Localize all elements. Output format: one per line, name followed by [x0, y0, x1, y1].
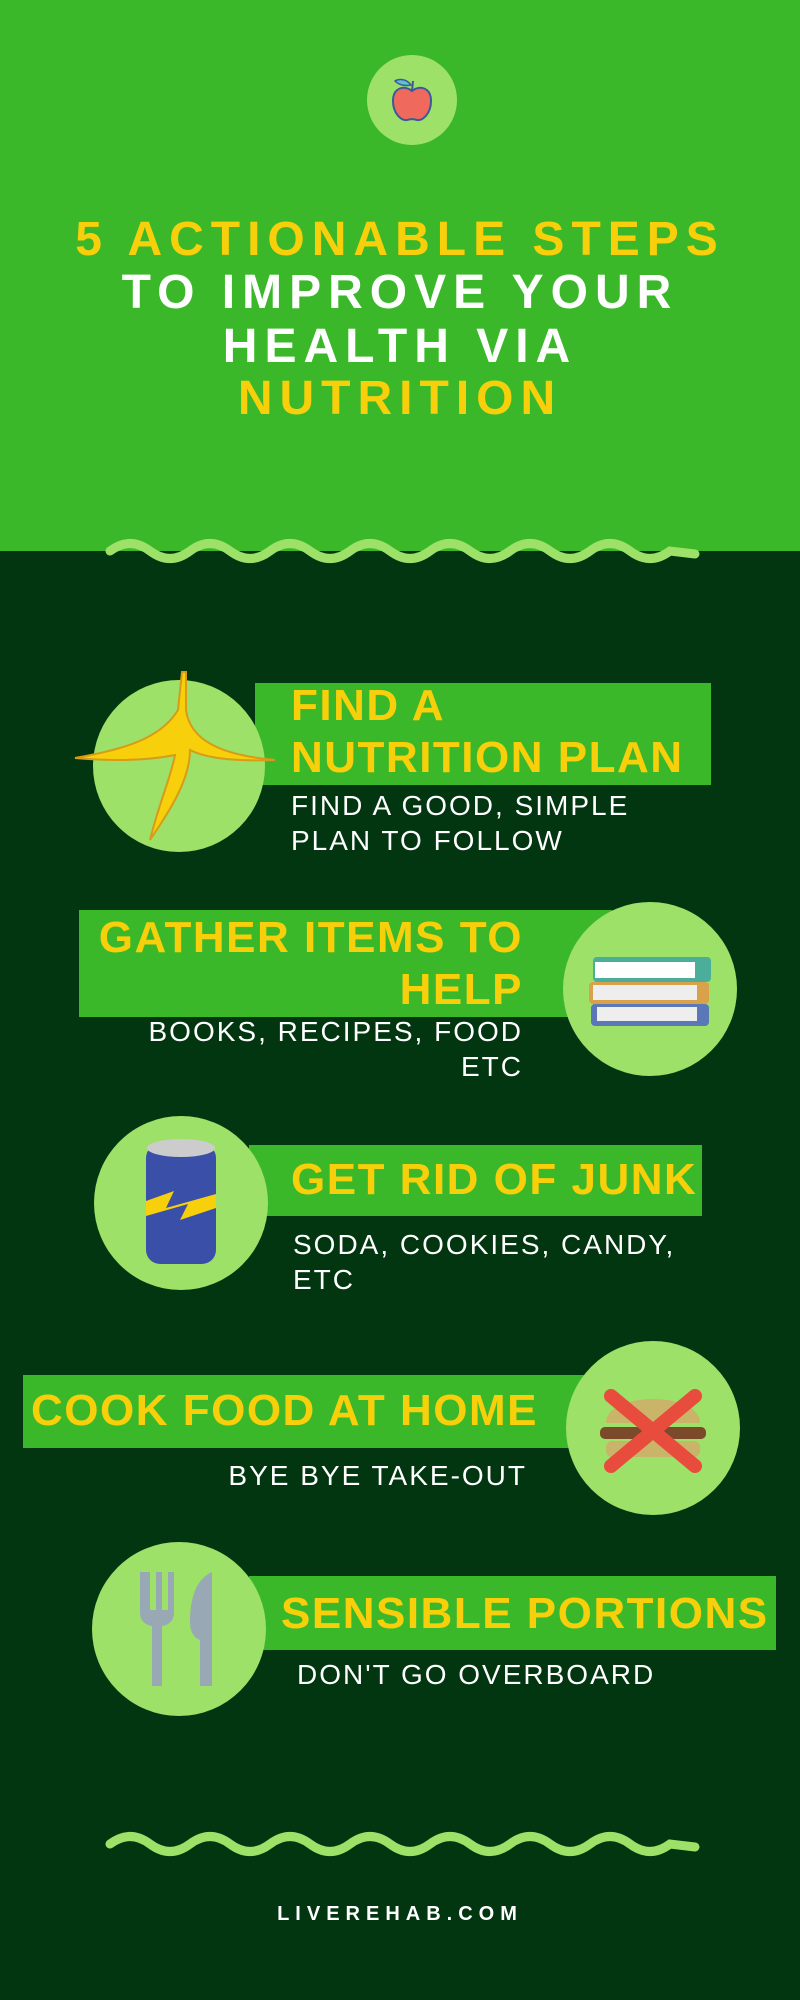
subtitle: SODA, COOKIES, CANDY, [293, 1229, 675, 1260]
title: TO IMPROVE YOUR [122, 266, 678, 319]
heading: GATHER ITEMS TO [99, 913, 523, 962]
icon: apple [367, 55, 457, 145]
header panel [0, 0, 800, 551]
title: NUTRITION [238, 372, 562, 425]
heading: NUTRITION PLAN [291, 733, 684, 782]
heading: FIND A [291, 681, 445, 730]
title [75, 213, 725, 425]
heading: SENSIBLE PORTIONS [281, 1589, 769, 1638]
subtitle: ETC [293, 1264, 355, 1295]
subtitle: DON'T GO OVERBOARD [297, 1659, 655, 1690]
step 1 [74, 671, 711, 856]
subtitle [293, 1229, 675, 1295]
subtitle: BOOKS, RECIPES, FOOD [148, 1016, 523, 1047]
heading: HELP [400, 965, 523, 1014]
step 2 [79, 902, 737, 1082]
heading [291, 681, 684, 782]
icon: banana peel [93, 680, 265, 852]
subtitle [291, 790, 629, 856]
heading: COOK FOOD AT HOME [31, 1386, 538, 1435]
title: HEALTH VIA [223, 320, 577, 373]
subtitle: PLAN TO FOLLOW [291, 825, 564, 856]
footer: LIVEREHAB.COM [277, 1903, 523, 1925]
wave top [106, 538, 700, 564]
subtitle [148, 1016, 523, 1082]
step 4 [23, 1341, 740, 1515]
heading: GET RID OF JUNK [291, 1155, 697, 1204]
icon: books [563, 902, 737, 1076]
heading [99, 913, 523, 1014]
subtitle: BYE BYE TAKE-OUT [228, 1460, 527, 1491]
step 5 [92, 1542, 776, 1716]
wave bottom [106, 1832, 700, 1856]
step 3 [94, 1116, 702, 1295]
icon: crossed burger [566, 1341, 740, 1515]
subtitle: FIND A GOOD, SIMPLE [291, 790, 629, 821]
icon: fork and knife [92, 1542, 266, 1716]
subtitle: ETC [461, 1051, 523, 1082]
icon: soda can [94, 1116, 268, 1290]
title: 5 ACTIONABLE STEPS [75, 213, 725, 266]
